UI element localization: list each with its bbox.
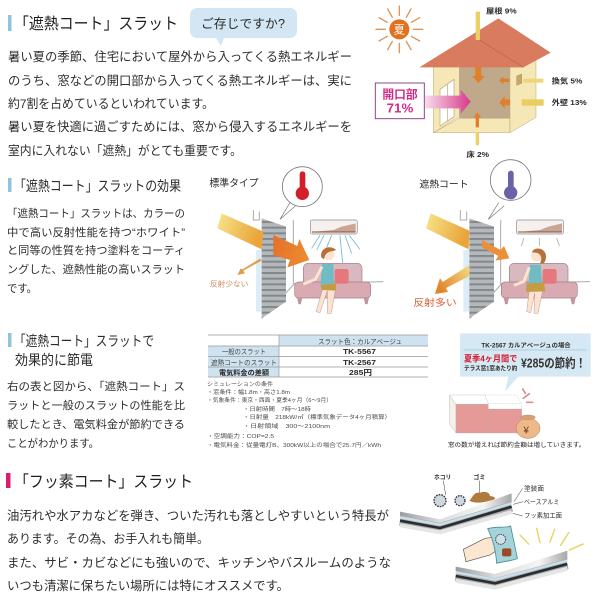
intro text block: 暑い夏を快適に過ごすためには、窓から侵入するエネルギーを xyxy=(8,119,352,134)
arrow: incoming sun xyxy=(217,213,263,249)
arrow: wall 13% xyxy=(499,96,544,109)
arrow: small heat through xyxy=(482,240,509,261)
label: 反射少ない: 反射少ない xyxy=(210,279,248,288)
callout: 285円の節約: 夏季4ヶ月間で xyxy=(464,354,517,364)
labels: percentages xyxy=(466,5,587,159)
labels: percentages: 外壁 13% xyxy=(552,97,587,107)
callout: 285円の節約: ¥285の節約！ xyxy=(521,356,586,371)
comparison table: スラット色：カルアベージュ xyxy=(318,337,402,346)
labels: dust and dirt: ホコリ xyxy=(434,474,451,481)
comparison table xyxy=(208,335,428,377)
arrow: heat through xyxy=(273,235,309,267)
savings text block: ラットと一般のスラットの性能を比 xyxy=(7,398,185,412)
savings text block: ことがわかります。 xyxy=(7,436,99,450)
callout: ご存じですか xyxy=(190,8,297,46)
section heading: 効果的に節電: 「遮熱コート」スラットで xyxy=(14,333,154,349)
effect text block: と同等の性質を持つ塗料をコーティ xyxy=(7,243,185,257)
upper coated slat xyxy=(400,493,512,532)
arrow: ventilation 5% xyxy=(499,74,543,85)
icon: sun xyxy=(376,6,423,53)
fluorine text block: いつも清潔に保ちたい場所には特にオススメです。 xyxy=(7,578,289,593)
cold air lines xyxy=(521,238,559,246)
labels: dust and dirt xyxy=(434,473,485,481)
simulation conditions: ・日射領域 300～2100nm xyxy=(243,422,330,430)
comparison table: 遮熱コートのスラット xyxy=(211,358,277,367)
sofa xyxy=(295,263,371,304)
callout: 285円の節約: TK-2567 カルアベージュの場合 xyxy=(481,342,571,350)
label: 開口部 71%: 71% xyxy=(387,102,413,116)
section heading: 遮熱コート スラット: 「遮熱コート」スラット xyxy=(14,15,178,33)
intro text block: 暑い夏の季節、住宅において屋外から入ってくる熱エネルギー xyxy=(8,49,352,64)
shine rays xyxy=(520,528,583,550)
intro text block: 約7割を占めているといわれています。 xyxy=(8,96,214,111)
section heading: フッ素コート スラット: 「フッ素コート」スラット xyxy=(14,473,193,491)
air conditioner xyxy=(310,220,357,234)
slat blind xyxy=(469,218,494,318)
sofa xyxy=(501,263,577,304)
simulation conditions: ・空調能力：COP=2.5 xyxy=(207,432,274,440)
fluorine text block: また、サビ・カビなどにも強いので、キッチンやバスルームのような xyxy=(7,556,391,570)
arrow: opening 71% xyxy=(425,89,471,114)
sparkle marks xyxy=(523,389,533,402)
labels: layers: 塗装面 xyxy=(524,484,544,493)
callout: ご存じですか: ご存じですか? xyxy=(201,16,285,31)
arrow: incoming sun xyxy=(426,213,469,249)
callout: 285円の節約: テラス窓1窓あたり約 xyxy=(464,365,517,373)
scene: standard type xyxy=(209,167,383,318)
section heading: 効果的に節電 xyxy=(8,333,154,368)
icon: coin purse: ¥ xyxy=(522,425,529,436)
labels: percentages: 屋根 9% xyxy=(486,5,517,15)
icon: coin purse xyxy=(516,415,540,438)
simulation conditions: ・日射時間 7時～18時 xyxy=(243,405,311,413)
labels: dust and dirt: ゴミ xyxy=(473,473,485,481)
label: 反射多い: 反射多い xyxy=(413,297,457,309)
savings text block xyxy=(7,379,185,450)
labels: layers xyxy=(524,484,562,520)
bar: standard slat cost xyxy=(449,395,488,433)
room structure xyxy=(253,210,383,318)
simulation conditions xyxy=(207,380,391,449)
arrow: large reflection xyxy=(435,265,469,294)
scene: heat coat xyxy=(413,160,590,318)
labels: layers: フッ素加工面 xyxy=(524,511,562,520)
effect text block: です。 xyxy=(7,282,37,295)
leader lines xyxy=(443,481,523,516)
savings text block: 右の表と図から、「遮熱コート」ス xyxy=(7,379,185,393)
arrow: small reflection xyxy=(237,259,262,275)
effect text block: 「遮熱コート」スラットは、カラーの xyxy=(7,207,185,220)
cold air lines xyxy=(312,235,360,263)
air conditioner xyxy=(516,220,564,234)
simulation conditions: ・電気料金：従量電灯B、300kW以上の場合で25.7円／kWh xyxy=(207,441,381,449)
icon: red thermometer bubble xyxy=(280,167,322,219)
comparison table: 285円 xyxy=(349,368,372,377)
section heading: 効果的に節電: 効果的に節電 xyxy=(15,352,93,368)
comparison table: TK-5567 xyxy=(343,347,376,356)
intro text block: 室内に入れない「遮熱」がとても重要です。 xyxy=(8,143,242,158)
woman seated xyxy=(514,249,546,313)
intro text block: のうち、窓などの開口部から入ってくる熱エネルギーは、実に xyxy=(8,73,352,88)
labels: percentages: 床 2% xyxy=(466,150,489,159)
hand with cloth xyxy=(463,526,517,563)
fluorine text block xyxy=(7,508,391,593)
house body xyxy=(419,18,551,133)
arrow: roof 9% xyxy=(472,12,485,83)
fluorine text block: 油汚れや水アカなどを弾き、ついた汚れも落としやすいという特長が xyxy=(7,508,390,523)
label: 遮熱コート: 遮熱コート xyxy=(419,178,469,190)
icon: sun: 夏 xyxy=(394,23,405,36)
effect text block: ングした、遮熱性能の高いスラット xyxy=(7,262,185,276)
section heading: 遮熱コート スラットの効果: 「遮熱コート」スラットの効果 xyxy=(14,178,181,194)
label: 標準タイプ: 標準タイプ xyxy=(209,177,259,190)
effect text block xyxy=(7,207,185,295)
simulation conditions: シミュレーションの条件 xyxy=(207,380,273,388)
house heat diagram xyxy=(375,5,587,159)
room structure xyxy=(460,210,590,318)
simulation conditions: ・日射量 218kW/㎡（標準気象データ4ヶ月積算） xyxy=(243,413,391,421)
caption: 窓の数が増えれば節約金額は増していきます。 xyxy=(448,441,585,449)
effect text block: 中で高い反射性能を持つ“ホワイト” xyxy=(7,225,185,239)
coating diagram xyxy=(400,473,583,588)
bar: heat coat slat cost xyxy=(485,395,522,433)
label: 開口部 71%: 開口部 xyxy=(382,87,418,101)
comparison table: TK-2567 xyxy=(343,358,376,367)
woman seated xyxy=(303,247,336,313)
intro text block xyxy=(8,49,352,158)
labels: percentages: 換気 5% xyxy=(552,76,583,86)
icon: purple thermometer bubble xyxy=(488,160,531,219)
savings graphic xyxy=(448,333,591,449)
dust icons xyxy=(434,495,465,507)
dirt blob xyxy=(469,492,495,503)
simulation conditions: ・気象条件：東京・西面・夏季4ヶ月（6～9月） xyxy=(207,396,332,404)
labels: layers: ベースアルミ xyxy=(524,498,559,506)
slat blind xyxy=(262,218,286,318)
callout: 285円の節約 xyxy=(460,333,591,392)
comparison table: 一般のスラット xyxy=(222,347,266,356)
fluorine text block: あります。その為、お手入れも簡単。 xyxy=(7,531,209,546)
arrow: floor 2% xyxy=(473,112,481,145)
savings text block: 較したとき、電気料金が節約できる xyxy=(7,417,185,431)
label: 開口部 71% xyxy=(375,83,424,119)
comparison table: 電気料金の差額 xyxy=(219,368,269,377)
simulation conditions: ・窓条件：幅1.8m・高さ1.8m xyxy=(207,388,290,396)
lower coated slat xyxy=(456,551,567,588)
